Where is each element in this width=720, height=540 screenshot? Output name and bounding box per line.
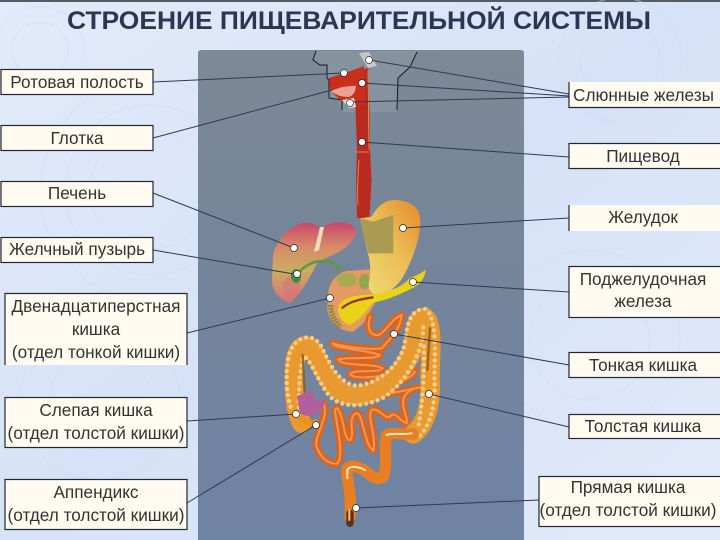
label: appendix: (отдел толстой кишки)	[8, 505, 184, 525]
label: cecum: Слепая кишка	[39, 400, 153, 420]
label: pharynx	[1, 126, 153, 150]
label: esophagus: Пищевод	[606, 146, 680, 166]
label: duodenum: Двенадцатиперстная	[12, 296, 180, 316]
cecum	[297, 390, 325, 417]
label: small intestine: Тонкая кишка	[589, 355, 697, 375]
label: pancreas: Поджелудочная	[580, 269, 706, 289]
connector lines	[153, 60, 569, 508]
label: small intestine	[569, 352, 720, 378]
label: rectum	[539, 476, 720, 526]
label: pancreas: железа	[614, 291, 672, 311]
liver	[272, 223, 356, 303]
neck and head silhouette	[313, 51, 417, 112]
label: rectum: (отдел толстой кишки)	[540, 500, 716, 520]
label: liver	[1, 182, 153, 206]
esophagus	[356, 68, 372, 218]
stomach	[360, 200, 420, 295]
label: appendix	[5, 480, 187, 530]
appendix	[300, 417, 318, 423]
label: large intestine: Толстая кишка	[585, 416, 702, 436]
label: pancreas	[569, 266, 720, 318]
label: cecum: (отдел толстой кишки)	[8, 423, 184, 443]
label: pharynx: Глотка	[50, 128, 104, 148]
label: appendix: Аппендикс	[53, 482, 139, 502]
label: esophagus	[569, 144, 720, 168]
gallbladder sac	[291, 269, 301, 283]
label: rectum: Прямая кишка	[571, 477, 686, 497]
label: duodenum	[5, 293, 187, 365]
panel: body diagram	[198, 50, 524, 540]
esophagus highlight	[356, 70, 369, 205]
label: gallbladder: Желчный пузырь	[9, 239, 145, 259]
rectum and sigmoid	[347, 433, 413, 523]
pancreas	[338, 269, 426, 325]
small intestine	[316, 315, 420, 464]
label: liver: Печень	[48, 183, 106, 203]
label: duodenum: (отдел тонкой кишки)	[12, 342, 180, 362]
label: cecum	[5, 398, 187, 448]
duodenum	[327, 269, 377, 332]
large intestine	[287, 309, 435, 438]
mouth cavity	[329, 66, 366, 108]
label: salivary glands: Слюнные железы	[573, 85, 714, 105]
label: stomach: Желудок	[608, 207, 678, 227]
label: duodenum: кишка	[72, 319, 121, 339]
marker dots	[290, 56, 432, 512]
gallbladder	[297, 261, 341, 275]
title: СТРОЕНИЕ ПИЩЕВАРИТЕЛЬНОЙ СИСТЕМЫ	[67, 5, 651, 35]
label: mouth cavity: Ротовая полость	[10, 72, 144, 92]
label: stomach	[569, 205, 720, 231]
label: large intestine	[569, 414, 720, 438]
